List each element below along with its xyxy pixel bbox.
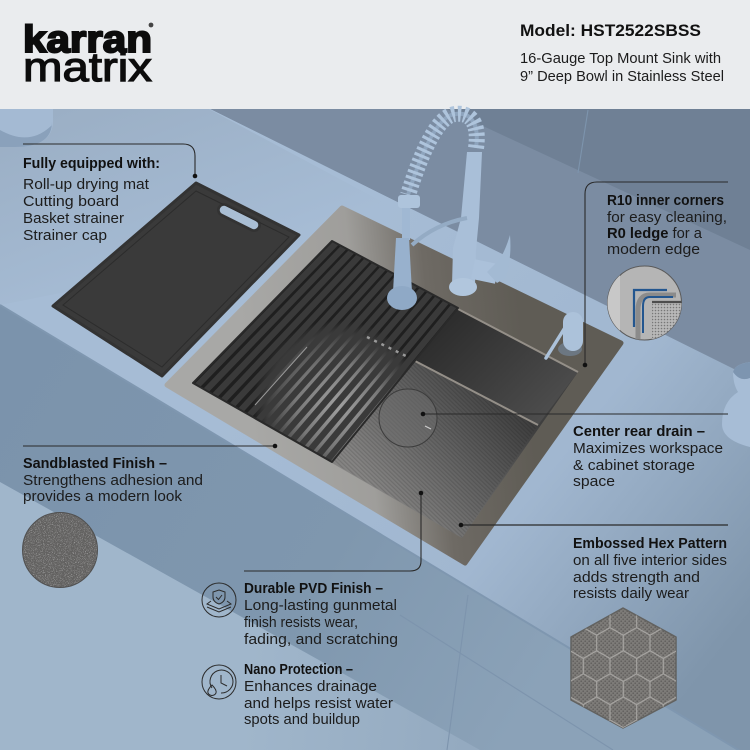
text: fully equipped: Cutting board: [23, 194, 119, 210]
text: embossed hex pattern: resists daily wear: [573, 586, 689, 602]
text: sandblasted finish: provides a modern look: [23, 489, 183, 505]
text: durable PVD finish: [244, 581, 398, 648]
leader line: accessories: [23, 144, 197, 178]
leader line: drain: [421, 412, 728, 416]
model description: 16-Gauge Top Mount Sink with: [520, 51, 721, 67]
model heading: Model: HST2522SBSS: [520, 22, 701, 40]
icon: clock and water drop: [202, 665, 236, 699]
icon: shield on layers: [202, 583, 236, 617]
sink: [167, 208, 621, 563]
ledge highlight: [415, 309, 578, 425]
text: embossed hex pattern: [573, 536, 727, 602]
leader line: sandblasted: [23, 444, 277, 448]
back wall of bowl: [415, 308, 578, 425]
text: durable PVD finish: Durable PVD Finish –: [244, 581, 383, 597]
text: embossed hex pattern: on all five interior sides: [573, 553, 727, 569]
roll-up drying mat: [193, 241, 458, 462]
logo: karran: [23, 19, 152, 61]
text: durable PVD finish: Long-lasting gunmetal: [244, 598, 397, 614]
text: durable PVD finish: fading, and scratching: [244, 632, 398, 648]
text: fully equipped: Roll-up drying mat: [23, 177, 149, 193]
text: fully equipped: Basket strainer: [23, 211, 124, 227]
sink bowl floor: [193, 241, 578, 538]
leader line: PVD finish: [244, 491, 423, 571]
cutting board: [53, 183, 299, 376]
text: center rear drain: Maximizes workspace: [573, 441, 723, 457]
embossed floor ribs: [332, 362, 538, 538]
faucet: [387, 114, 510, 310]
logo: [23, 19, 153, 90]
text: nano protection: Nano Protection –: [244, 662, 353, 678]
text: fully equipped: Strainer cap: [23, 228, 107, 244]
text: nano protection: and helps resist water: [244, 696, 393, 712]
leader line: corners: [583, 182, 728, 367]
header band: [0, 0, 750, 109]
text: corners: R0 ledge for a: [607, 226, 703, 242]
text: sandblasted finish: Sandblasted Finish –: [23, 456, 167, 472]
text: corners: for easy cleaning,: [607, 210, 727, 226]
model description: [520, 51, 724, 85]
text: embossed hex pattern: Embossed Hex Pattern: [573, 536, 727, 552]
text: center rear drain: [573, 424, 723, 490]
text: center rear drain: space: [573, 474, 615, 490]
text: corners: [607, 193, 727, 258]
text: corners: R10 inner corners: [607, 193, 724, 209]
text: nano protection: [244, 662, 393, 728]
inset: sandblasted texture: [22, 512, 98, 588]
leader line: hex pattern: [459, 523, 728, 527]
text: embossed hex pattern: adds strength and: [573, 570, 700, 586]
text: nano protection: Enhances drainage: [244, 679, 377, 695]
text: fully equipped: [23, 156, 160, 244]
text: fully equipped: Fully equipped with:: [23, 156, 160, 172]
text: nano protection: spots and buildup: [244, 712, 360, 728]
model description: 9” Deep Bowl in Stainless Steel: [520, 69, 724, 85]
text: center rear drain: Center rear drain –: [573, 424, 705, 440]
text: sandblasted finish: [23, 456, 203, 505]
drain: [379, 389, 437, 447]
soap dispenser: [546, 322, 582, 358]
text: center rear drain: & cabinet storage: [573, 458, 695, 474]
text: sandblasted finish: Strengthens adhesion and: [23, 473, 203, 489]
logo: matrix: [23, 44, 153, 90]
text: durable PVD finish: finish resists wear,: [244, 615, 358, 631]
inset: hex pattern: [571, 608, 676, 728]
text: corners: modern edge: [607, 242, 700, 258]
inset: corner detail: [607, 266, 684, 343]
